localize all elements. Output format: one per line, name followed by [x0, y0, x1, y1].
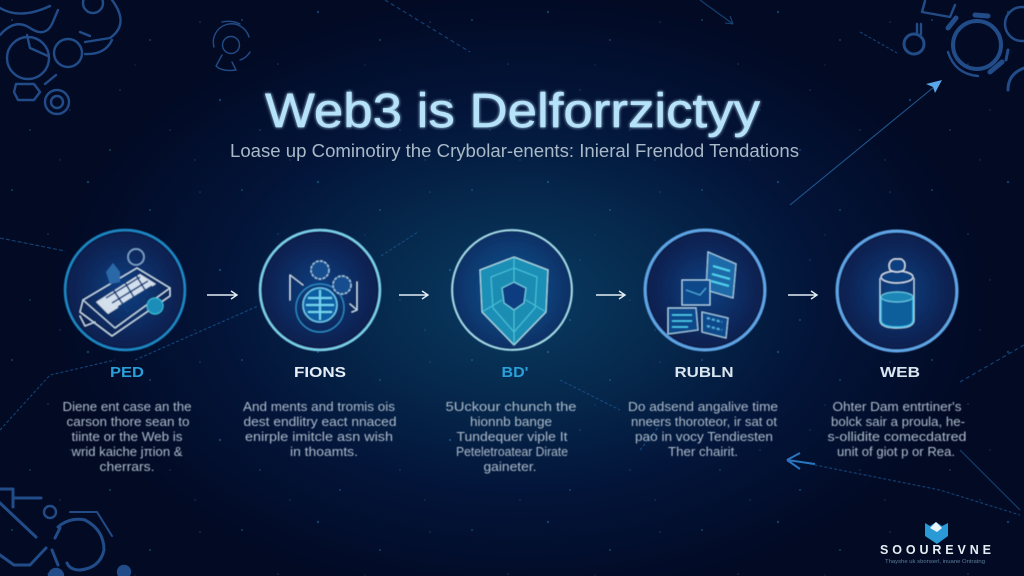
subtitle: Loase up Cominotiry the Crybolar-enents: Inieral Frendod Tendations — [230, 141, 799, 161]
text block 5: unit of giot p or Rea. — [837, 444, 955, 459]
arrow 3 — [596, 291, 625, 299]
decoration: gears top right — [904, 1, 1024, 90]
text block 4 — [628, 399, 778, 459]
logo: SOOUREVNE — [880, 543, 991, 557]
logo: Thayshe uk sbonserl, inuane Ontratng — [885, 559, 985, 565]
step labels — [110, 364, 920, 381]
text block 1: tiinte or the Web is — [72, 429, 183, 444]
icon: background arrow up right — [926, 80, 942, 93]
text block 3: 5Uckour chunch the — [446, 399, 576, 414]
text block 5: bolck sair a proula, he- — [831, 414, 965, 429]
text block 5: s-ollidite comecdatred — [828, 429, 966, 444]
text block 5: Ohter Dam entrtiner's — [832, 399, 962, 414]
text block 1: wrid kaiche jπion & — [70, 444, 183, 459]
arrow 4 — [788, 291, 817, 299]
text block 4: Ther chairit. — [668, 444, 738, 459]
step labels: PED — [110, 364, 144, 381]
step labels: FIONS — [294, 364, 346, 381]
text block 3 — [446, 399, 576, 474]
text block 3: Peteletroatear Dirate — [456, 444, 568, 459]
text block 4: Do adsend angalive time — [628, 399, 778, 414]
text block 3: hionnb bange — [470, 414, 552, 429]
text block 1: Diene ent case an the — [62, 399, 192, 414]
text block 5 — [828, 399, 966, 459]
text block 2: dest endlitry eact nnaced — [244, 414, 396, 429]
text block 2: enirple imitcle asn wish — [245, 429, 393, 444]
step 4: icon circle documents — [645, 230, 765, 350]
text block 2: in thoamts. — [290, 444, 358, 459]
decoration: gears bottom left — [0, 489, 130, 576]
text block 2: And ments and tromis ois — [243, 399, 396, 414]
decoration: small gear top — [213, 21, 250, 70]
text block 4: pao in vocy Tendiesten — [635, 429, 773, 444]
step 2: icon circle coin — [260, 230, 380, 350]
step 1: icon circle keyboard — [65, 230, 185, 350]
step labels: RUBLN — [674, 364, 734, 381]
step 3: icon circle shield — [452, 230, 572, 350]
text block 1: carson thore sean to — [66, 414, 190, 429]
step labels: BD' — [502, 364, 528, 381]
text block 1: cherrars. — [100, 459, 154, 474]
arrow 1 — [207, 291, 237, 299]
icon: background arrow left — [787, 453, 815, 469]
text block 3: gaineter. — [484, 459, 536, 474]
decoration: gears top left — [0, 0, 121, 114]
title: Web3 is Delforrzictyy — [265, 85, 760, 138]
text block 2 — [243, 399, 396, 459]
arrow 2 — [399, 291, 428, 299]
logo — [880, 522, 991, 565]
text block 4: nneers thoroteor, ir sat ot — [631, 414, 777, 429]
text block 1 — [62, 399, 192, 474]
step 5: icon circle bottle — [837, 231, 957, 351]
step labels: WEB — [880, 364, 920, 381]
text block 3: Tundequer viple It — [456, 429, 568, 444]
